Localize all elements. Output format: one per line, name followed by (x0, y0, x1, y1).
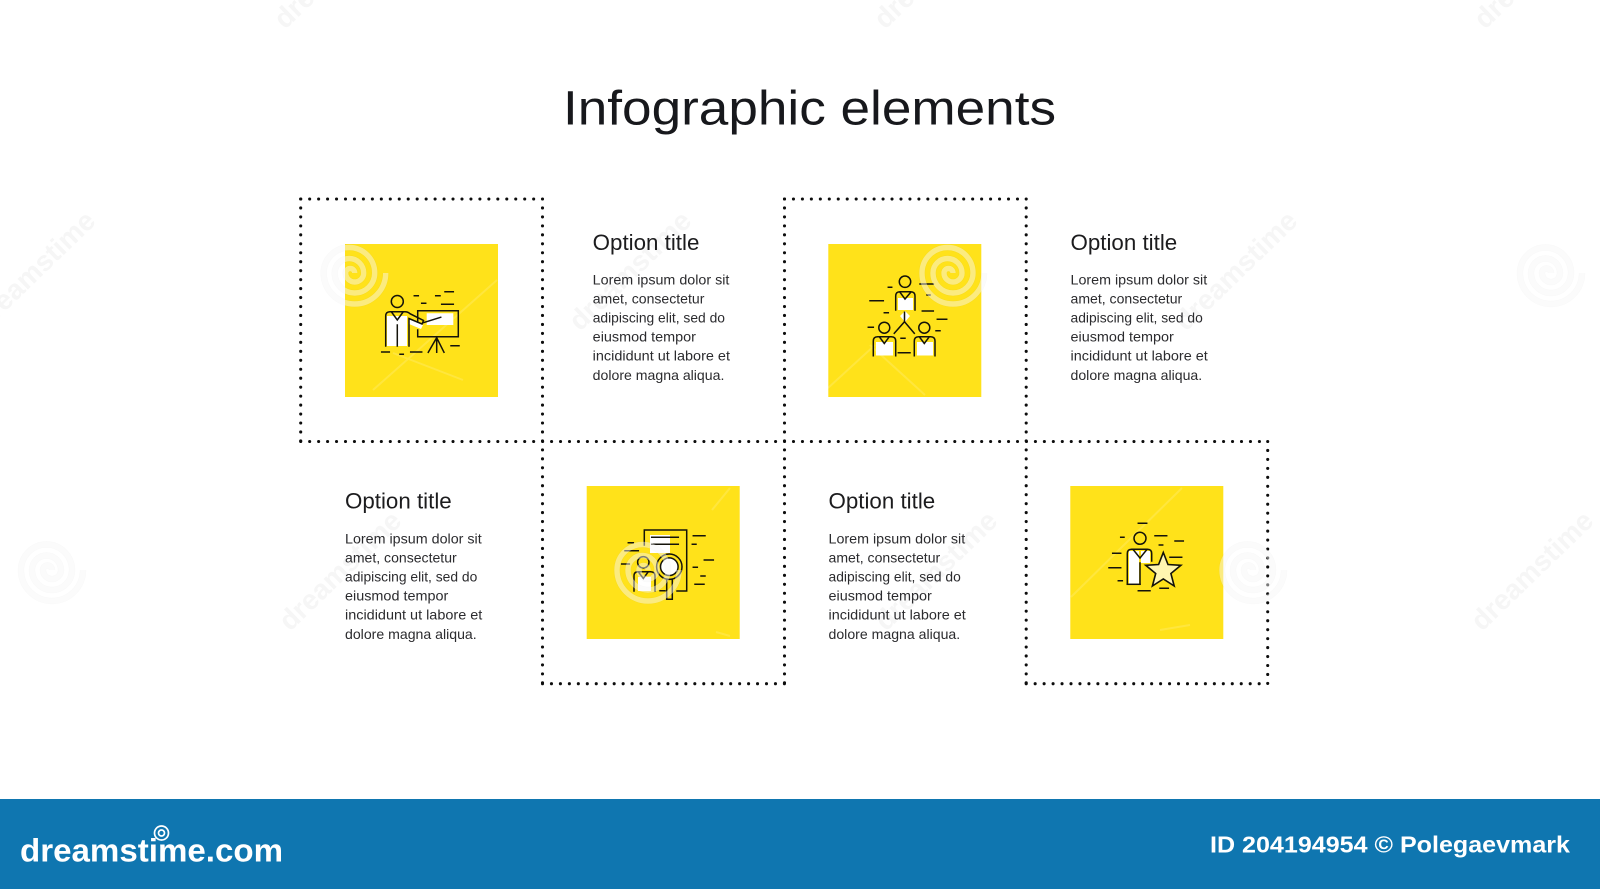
title: Infographic elements (563, 82, 1056, 136)
panel: text block two: Option title (1070, 230, 1177, 255)
icon: presenter with board (382, 292, 459, 354)
panel: text block one: dolore magna aliqua. (593, 367, 724, 383)
panel: text block one: incididunt ut labore et (593, 348, 730, 364)
panel: text block one: Lorem ipsum dolor sit (593, 271, 730, 287)
panel: text block three: amet, consectetur (345, 549, 457, 565)
panel: presentation icon tile (345, 244, 498, 397)
panel: text block four (828, 488, 966, 642)
watermark text (0, 0, 1600, 636)
footer logo: dreamstime.com (20, 832, 283, 868)
watermark text: dreamstime (1169, 205, 1303, 336)
panel: text block two: eiusmod tempor (1070, 329, 1174, 345)
footer band (0, 799, 1600, 889)
panel: text block one: eiusmod tempor (593, 329, 696, 345)
watermark spirals (21, 248, 1582, 601)
icon: logo spiral (154, 826, 168, 840)
panel: text block four: eiusmod tempor (828, 588, 932, 604)
panel: text block three: Option title (345, 488, 452, 513)
panel: text block two: incididunt ut labore et (1070, 348, 1208, 364)
watermark text: dreamstime (1465, 505, 1599, 636)
panel: text block one (593, 230, 730, 383)
icon: three people hierarchy (868, 276, 947, 356)
panel: text block four: Option title (828, 488, 935, 513)
panel: text block three (345, 488, 482, 642)
panel: text block two: Lorem ipsum dolor sit (1070, 271, 1207, 287)
dotted grid frames (301, 199, 1268, 684)
icon: person with document and magnifier (622, 530, 713, 599)
panel: text block two (1070, 230, 1208, 383)
panel: text block one: adipiscing elit, sed do (593, 310, 725, 326)
panel: text block three: eiusmod tempor (345, 588, 449, 604)
panel: text block four: dolore magna aliqua. (828, 626, 960, 642)
panel: text block three: adipiscing elit, sed do (345, 568, 477, 584)
panel: document search icon tile (587, 486, 740, 639)
panel: text block two: adipiscing elit, sed do (1070, 310, 1203, 326)
icon: person with star (1109, 523, 1183, 591)
footer image id and credit: ID 204194954 © Polegaevmark (1210, 831, 1571, 857)
watermark text: dreamstime (563, 205, 697, 336)
panel: text block four: Lorem ipsum dolor sit (828, 530, 965, 546)
panel: text block four: incididunt ut labore et (828, 607, 966, 623)
panel: text block four: adipiscing elit, sed do (828, 568, 961, 584)
panel: text block two: amet, consectetur (1070, 290, 1183, 306)
panel: text block three: dolore magna aliqua. (345, 626, 477, 642)
panel: text block one: amet, consectetur (593, 290, 705, 306)
panel: text block four: amet, consectetur (828, 549, 941, 565)
panel: text block two: dolore magna aliqua. (1070, 367, 1202, 383)
panel: text block one: Option title (593, 230, 699, 255)
watermark text: dreamstime (273, 505, 407, 636)
panel: team hierarchy icon tile (828, 244, 981, 397)
panel: star employee icon tile (1070, 486, 1223, 639)
icon: star (1146, 552, 1181, 586)
watermark text: dreamstime (869, 505, 1003, 636)
panel: text block three: Lorem ipsum dolor sit (345, 530, 482, 546)
panel: text block three: incididunt ut labore et (345, 607, 482, 623)
